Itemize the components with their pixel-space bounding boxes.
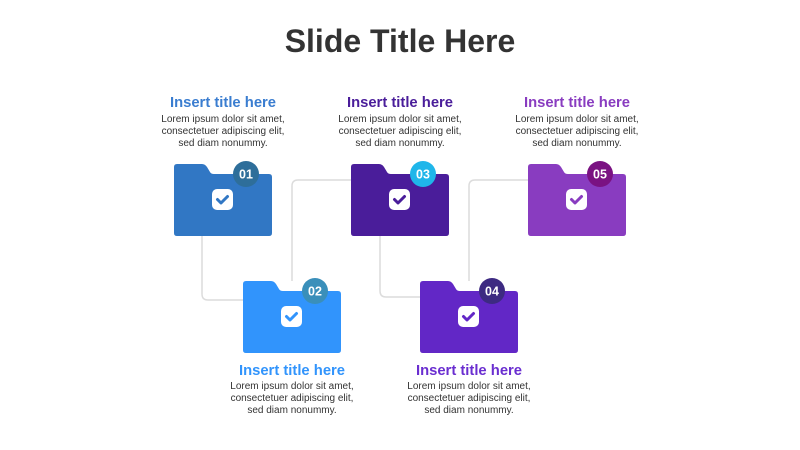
text 01 bbox=[161, 95, 285, 149]
text 02: Insert title here bbox=[239, 363, 345, 379]
folder 03 bbox=[351, 161, 449, 236]
text 02: Lorem ipsum dolor sit amet, bbox=[230, 381, 354, 392]
text 01: sed diam nonummy. bbox=[178, 138, 268, 149]
folder 01 bbox=[174, 161, 272, 236]
text 03: Insert title here bbox=[347, 95, 453, 111]
text 01: Lorem ipsum dolor sit amet, bbox=[161, 114, 285, 125]
folder 02: 02 bbox=[308, 284, 322, 298]
text 02 bbox=[230, 363, 354, 416]
text 02: consectetuer adipiscing elit, bbox=[231, 393, 353, 404]
text 04: sed diam nonummy. bbox=[424, 405, 514, 416]
text 05: Lorem ipsum dolor sit amet, bbox=[515, 114, 639, 125]
folder 03: 03 bbox=[416, 168, 430, 182]
text 03 bbox=[338, 95, 462, 149]
text 05: Insert title here bbox=[524, 95, 630, 111]
text 04: Insert title here bbox=[416, 363, 522, 379]
text 03: consectetuer adipiscing elit, bbox=[339, 126, 461, 137]
text 03: Lorem ipsum dolor sit amet, bbox=[338, 114, 462, 125]
folder 01: 01 bbox=[239, 168, 253, 182]
connectors bbox=[202, 180, 528, 300]
folder 04: 04 bbox=[485, 284, 499, 298]
text 04: Lorem ipsum dolor sit amet, bbox=[407, 381, 531, 392]
text 01: consectetuer adipiscing elit, bbox=[162, 126, 284, 137]
title: Slide Title Here bbox=[285, 23, 515, 59]
text 04 bbox=[407, 363, 531, 416]
text 05 bbox=[515, 95, 639, 149]
folder 04 bbox=[420, 278, 518, 353]
folder 02 bbox=[243, 278, 341, 353]
folder 05 bbox=[528, 161, 626, 236]
text 02: sed diam nonummy. bbox=[247, 405, 337, 416]
text 03: sed diam nonummy. bbox=[355, 138, 445, 149]
text 04: consectetuer adipiscing elit, bbox=[408, 393, 530, 404]
folder 05: 05 bbox=[593, 168, 607, 182]
text 05: sed diam nonummy. bbox=[532, 138, 622, 149]
text 01: Insert title here bbox=[170, 95, 276, 111]
text 05: consectetuer adipiscing elit, bbox=[516, 126, 638, 137]
